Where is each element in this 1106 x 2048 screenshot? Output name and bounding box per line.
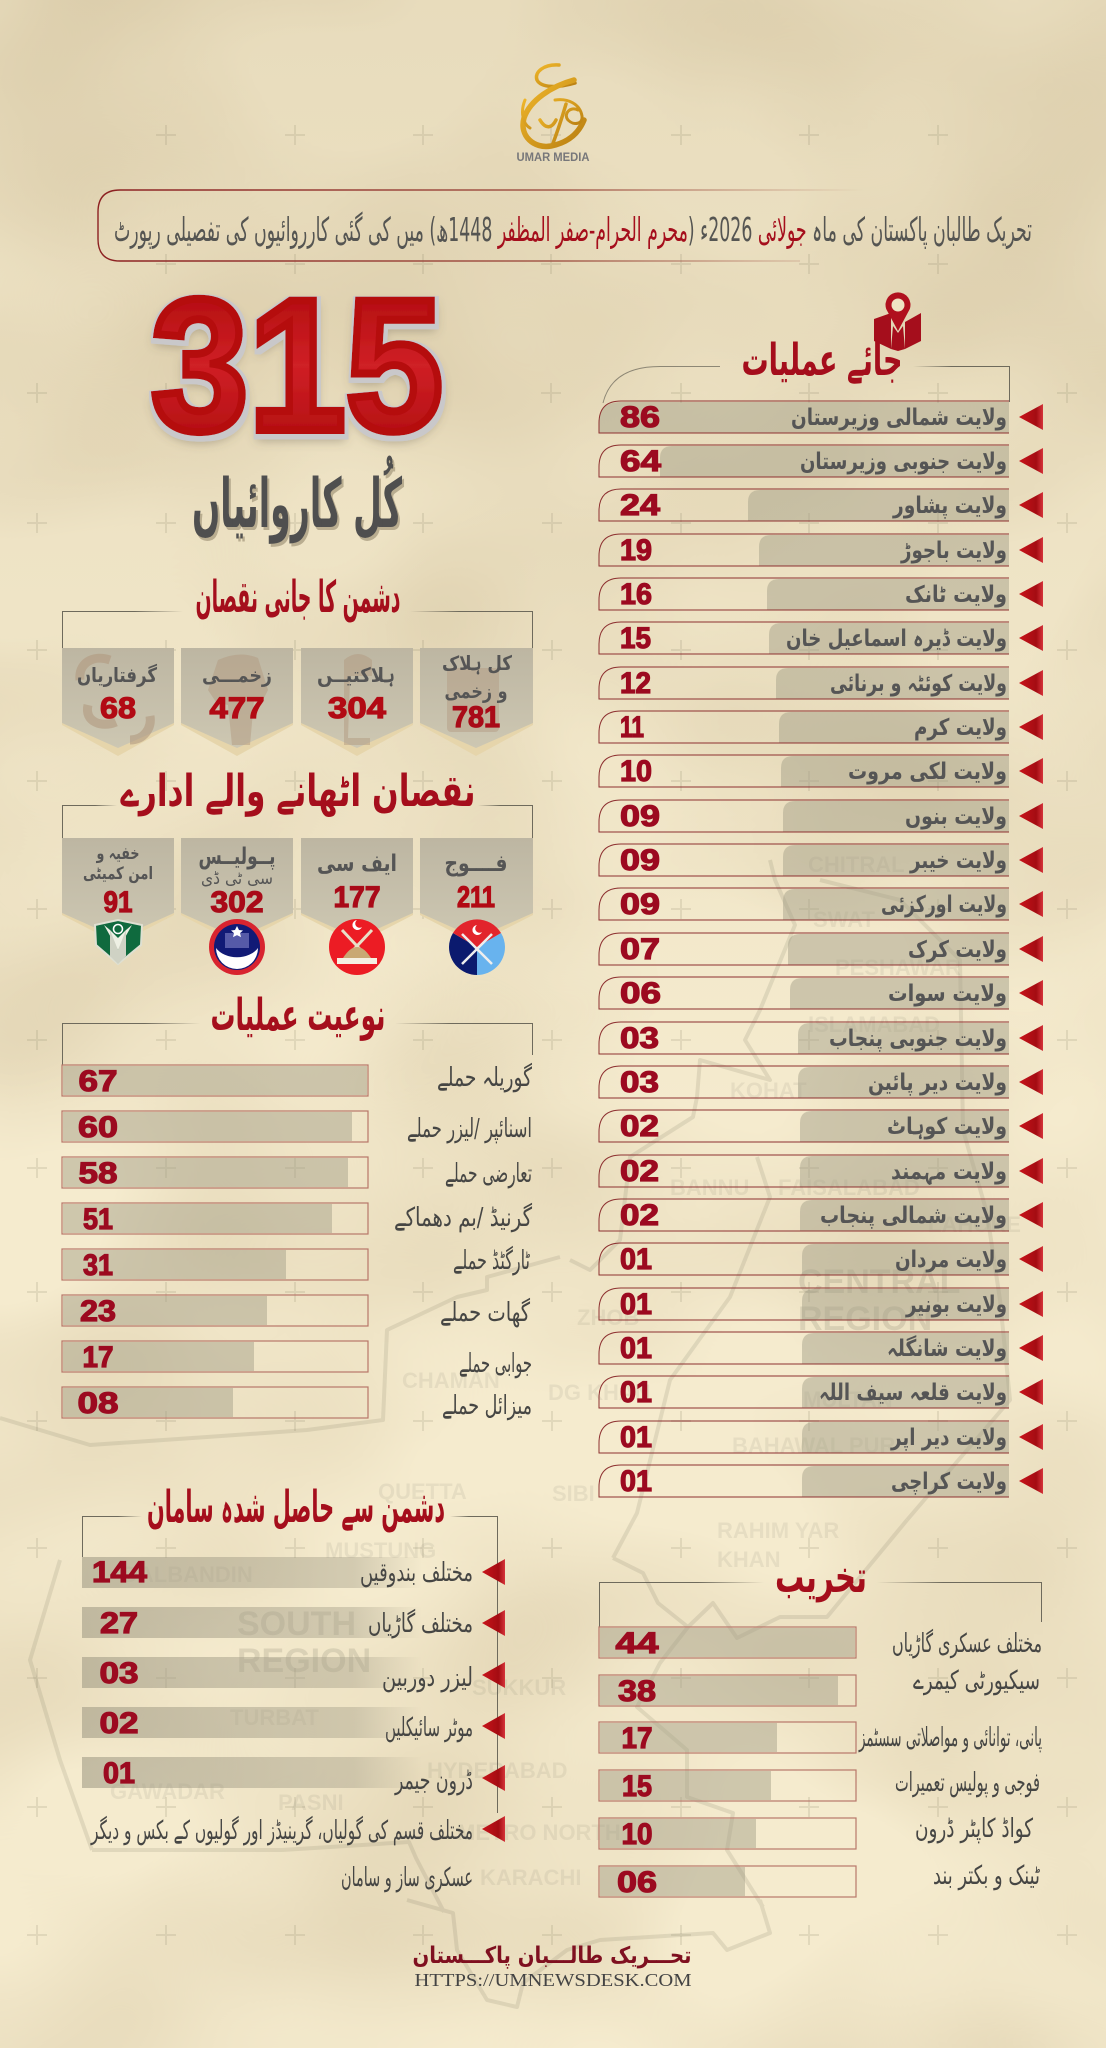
row: Karak 07 [599, 933, 1043, 966]
row: Mardan 01 [599, 1243, 1043, 1276]
row: South Waziristan 64: ولایت جنوبی وزیرستان [800, 449, 1007, 475]
row: Khyber 09 [599, 844, 1043, 877]
item: rifles 144: مختلف بندوقیں [360, 1558, 473, 1588]
background: faint map of Pakistan: KARACHI [480, 1865, 581, 1890]
row: Qila Saifullah 01 [599, 1376, 1043, 1409]
card: police and CTD: 302 [210, 886, 264, 919]
background: faint map of Pakistan: ISLAMABAD [808, 1012, 940, 1037]
row: Swat 06: 06 [620, 977, 661, 1010]
bar: utility systems 17 [599, 1722, 856, 1755]
row: Bannu 09: ولایت بنوں [905, 804, 1007, 830]
operation type labels: گرنیڈ /بم دھماکے [394, 1202, 532, 1233]
background: faint map of Pakistan: REGION [237, 1642, 371, 1680]
row: North Waziristan 86 [599, 401, 1043, 434]
bar: counter attacks 17 [62, 1341, 368, 1374]
sabotage labels: ٹینک و بکتر بند [933, 1861, 1041, 1891]
background: faint map of Pakistan: ZHOB [577, 1305, 639, 1330]
card: secret and peace committee: 91 [104, 886, 132, 919]
card: wounded: 477 [210, 692, 264, 725]
background: faint map of Pakistan: RAHIM YAR [717, 1518, 839, 1543]
row: Mardan 01: 01 [620, 1243, 652, 1276]
row: Shangla 01: ولایت شانگلہ [887, 1335, 1007, 1362]
row: Dera Ismail Khan 15: ولایت ڈیرہ اسماعیل خان [786, 626, 1007, 652]
bar: sniper and laser attacks 60 [62, 1111, 368, 1144]
background: faint map of Pakistan: KHAN [717, 1547, 781, 1572]
row: Karak 07: ولایت کرک [908, 937, 1007, 963]
card: secret and peace committee [62, 838, 174, 964]
row: Peshawar 24 [599, 489, 1043, 522]
bar: tanks and armour 06 [599, 1866, 856, 1899]
bar: military and police buildings 15: 15 [622, 1770, 652, 1803]
icon: gold calligraphic mark [523, 65, 584, 146]
background: faint map of Pakistan: PASNI [278, 1790, 344, 1815]
row: Orakzai 09 [599, 888, 1043, 921]
row: Bannu 09 [599, 800, 1043, 833]
row: Mohmand 02: 02 [620, 1155, 659, 1188]
row: Bajaur 19 [599, 534, 1043, 567]
row: Kurram 11: 11 [620, 711, 644, 744]
background: faint map of Pakistan: TURBAT [230, 1705, 319, 1730]
background: faint map of Pakistan: DALBANDIN [122, 1562, 253, 1587]
item: laser scopes 03: 03 [100, 1657, 138, 1690]
icon: police badge [209, 919, 265, 975]
item: rifles 144: 144 [92, 1556, 147, 1589]
row: Kohat 02: 02 [620, 1110, 659, 1143]
row: Karachi 01 [599, 1465, 1043, 1498]
footer [412, 1943, 692, 1990]
card: army: 211 [457, 881, 495, 914]
card: wounded: زخمـــی [202, 663, 272, 687]
bar: guerrilla attacks 67: 67 [78, 1065, 118, 1098]
row: Upper Dir 01: ولایت دیر اپر [890, 1425, 1007, 1451]
icon: map with location pin [874, 292, 921, 351]
row: Quetta and Barnai 12 [599, 667, 1043, 700]
heading: places of operations: جائے عملیات [742, 335, 902, 386]
row: Kohat 02 [599, 1110, 1043, 1143]
row: Orakzai 09: ولایت اورکزئی [881, 892, 1007, 918]
item: drone jammer 01: ڈرون جیمر [394, 1766, 473, 1796]
row: South Waziristan 64 [599, 445, 1043, 478]
background: faint map of Pakistan: SWAT [813, 907, 875, 932]
operation type labels: اسنائپر /لیزر حملے [407, 1114, 532, 1144]
row: Mohmand 02 [599, 1155, 1043, 1188]
panel: enemy casualties: دشمن کا جانی نقصان [196, 572, 400, 623]
row: Swat 06: ولایت سوات [888, 981, 1007, 1007]
item: vehicles 27: مختلف گاڑیاں [368, 1608, 473, 1639]
row: Lower Dir 03: ولایت دیر پائین [868, 1070, 1007, 1096]
row: Kurram 11: ولایت کرم [914, 715, 1007, 741]
operation type labels: تعارضی حملے [445, 1159, 532, 1189]
row: Lakki Marwat 10: ولایت لکی مروت [848, 759, 1007, 785]
row: Karachi 01: 01 [620, 1465, 652, 1498]
row: Mardan 01: ولایت مردان [895, 1247, 1007, 1273]
panel: enemy casualties [62, 572, 533, 756]
row: Kohat 02: ولایت کوہاٹ [887, 1114, 1007, 1140]
item: drone jammer 01: 01 [103, 1757, 135, 1790]
background: faint map of Pakistan: KOHAT [730, 1078, 807, 1103]
row: Lower Dir 03: 03 [620, 1066, 659, 1099]
row: Kurram 11 [599, 711, 1043, 744]
card: FC: 177 [334, 881, 380, 914]
row: Bajaur 19: ولایت باجوڑ [900, 538, 1007, 564]
background: faint map of Pakistan: GAWADAR [110, 1779, 225, 1804]
row: Khyber 09: ولایت خیبر [909, 848, 1007, 874]
row: Bajaur 19: 19 [620, 534, 652, 567]
operation type labels: گھات حملے [440, 1297, 530, 1328]
background: faint map of Pakistan: CHAMAN [402, 1368, 500, 1393]
card: army: فــــوج [444, 851, 508, 877]
bar: grenade and bomb blasts 51 [62, 1203, 368, 1236]
row: Tank 16: 16 [620, 578, 652, 611]
background: faint map of Pakistan: MUSTUNG [325, 1538, 436, 1563]
card: killed [301, 648, 413, 756]
panel: sabotage [599, 1552, 1042, 1899]
operation type labels: میزائل حملے [442, 1391, 532, 1421]
row: Tank 16: ولایت ٹانک [905, 582, 1007, 608]
row: Quetta and Barnai 12: 12 [620, 667, 651, 700]
operation type labels [394, 1062, 532, 1421]
operation type labels: گوریلہ حملے [437, 1062, 532, 1093]
card: secret and peace committee: امن کمیٹی [83, 864, 153, 884]
row: Lower Dir 03 [599, 1066, 1043, 1099]
item: ammunition and other equipment [90, 1815, 505, 1893]
infographic page: کُل کاروائیاں [192, 455, 402, 544]
background: faint map of Pakistan: PESHAWAR [835, 955, 961, 980]
sabotage labels: سیکیورٹی کیمرے [913, 1666, 1040, 1696]
icon: army badge [449, 919, 505, 975]
heading: affected institutions: نقصان اٹھانے والے ادارے [120, 766, 476, 817]
frame [603, 366, 1010, 403]
bar: military vehicles 44: 44 [616, 1627, 659, 1660]
bar: missile attacks 08 [62, 1387, 368, 1420]
item: motorcycles 02 [82, 1707, 505, 1743]
bar: targeted attacks 31 [62, 1249, 368, 1282]
item: drone jammer 01 [82, 1757, 505, 1796]
panel: institutions suffering losses [62, 766, 533, 975]
card: arrests: گرفتاریاں [77, 663, 157, 687]
bar: security cameras 38: 38 [618, 1675, 656, 1708]
card: FC [301, 838, 413, 975]
row: Lakki Marwat 10 [599, 755, 1043, 788]
card: police and CTD: سی ٹی ڈی [201, 869, 273, 889]
footer organisation name: تحـــریک طالـــبان پاکـــستان [412, 1943, 692, 1969]
bar: ambush attacks 23 [62, 1295, 368, 1328]
row: Tank 16 [599, 578, 1043, 611]
background: faint map of Pakistan: MULTAN [803, 1387, 893, 1412]
bar: clashes 58 [62, 1157, 368, 1190]
background: faint map of Pakistan: METRO NORTH [457, 1820, 621, 1845]
row: North Punjab 02 [599, 1199, 1043, 1232]
bar: utility systems 17: 17 [622, 1722, 652, 1755]
row: North Waziristan 86: ولایت شمالی وزیرستان [791, 405, 1007, 431]
background: faint map of Pakistan: CENTRAL [798, 1263, 960, 1301]
row: North Punjab 02: 02 [620, 1199, 659, 1232]
bar: sniper and laser attacks 60: 60 [78, 1111, 118, 1144]
item: laser scopes 03: لیزر دوربین [382, 1663, 473, 1693]
sabotage labels: کواڈ کاپٹر ڈرون [915, 1814, 1033, 1844]
bar: quadcopter drones 10 [599, 1818, 856, 1851]
item: motorcycles 02: 02 [100, 1707, 138, 1740]
row: Lakki Marwat 10: 10 [620, 755, 652, 788]
card: secret and peace committee: خفیہ و [96, 844, 140, 864]
bar: ambush attacks 23: 23 [80, 1295, 116, 1328]
total operations 315: 315 [151, 260, 443, 470]
icon: committee shield [95, 920, 142, 964]
row: Buner 01: ولایت بونیر [905, 1292, 1007, 1318]
panel: equipment seized from enemy: دشمن سے حاصل شدہ سامان [147, 1482, 445, 1533]
card: arrests [62, 648, 174, 756]
row: Karak 07: 07 [620, 933, 660, 966]
row: Khyber 09: 09 [620, 844, 660, 877]
background: faint map of Pakistan: BANNU [670, 1175, 749, 1200]
bar: grenade and bomb blasts 51: 51 [83, 1203, 113, 1236]
row: Buner 01: 01 [620, 1288, 652, 1321]
panel: places of operations [599, 292, 1043, 1498]
row: South Punjab 03: ولایت جنوبی پنجاب [829, 1026, 1007, 1052]
operation type labels: جوابی حملے [459, 1349, 532, 1379]
bar: guerrilla attacks 67 [62, 1065, 368, 1098]
bar: military vehicles 44 [599, 1627, 856, 1660]
row: Orakzai 09: 09 [620, 888, 660, 921]
icon: FC badge [329, 919, 385, 975]
row: Karachi 01: ولایت کراچی [891, 1469, 1007, 1495]
card: FC: ایف سی [317, 851, 397, 877]
bar: targeted attacks 31: 31 [83, 1249, 113, 1282]
background: faint map of Pakistan [0, 852, 1021, 2007]
row: Dera Ismail Khan 15: 15 [620, 622, 651, 655]
card: total killed and wounded: 781 [452, 701, 500, 734]
row: Peshawar 24: 24 [620, 489, 660, 522]
item: vehicles 27 [82, 1607, 505, 1640]
item: ammunition and other equipment: مختلف قسم کی گولیاں، گرینیڈز اور گولیوں کے بکس و دیگر [90, 1815, 473, 1846]
bar: security cameras 38 [599, 1675, 856, 1708]
row: Quetta and Barnai 12: ولایت کوئٹہ و برنائی [830, 671, 1007, 697]
panel: equipment seized from enemy [82, 1482, 505, 1893]
row: South Punjab 03 [599, 1022, 1043, 1055]
row: Buner 01 [599, 1288, 1043, 1321]
background: faint map of Pakistan: DG KHAN [548, 1380, 651, 1405]
card: police and CTD [181, 838, 293, 975]
background: faint map of Pakistan: SOUTH [237, 1605, 356, 1643]
card: total killed and wounded [420, 648, 533, 756]
row: North Punjab 02: ولایت شمالی پنجاب [820, 1203, 1007, 1229]
background: faint map of Pakistan: CHITRAL [808, 852, 905, 877]
row: South Punjab 03: 03 [620, 1022, 659, 1055]
background: faint map of Pakistan: FAISALABAD [778, 1175, 920, 1200]
row: Shangla 01 [599, 1332, 1043, 1365]
card: total killed and wounded: و زخمی [444, 679, 508, 703]
card: total killed and wounded: کل ہلاک [442, 651, 512, 675]
row: Bannu 09: 09 [620, 800, 660, 833]
row: Mohmand 02: ولایت مہمند [891, 1159, 1007, 1185]
row: Dera Ismail Khan 15 [599, 622, 1043, 655]
item: motorcycles 02: موٹر سائیکلیں [385, 1713, 473, 1743]
title box [98, 190, 1032, 261]
bar: counter attacks 17: 17 [82, 1341, 114, 1374]
background: faint map of Pakistan: BAHAWAL PUR [732, 1433, 895, 1458]
card: army [420, 838, 533, 975]
bar: quadcopter drones 10: 10 [622, 1818, 652, 1851]
bar: tanks and armour 06: 06 [617, 1866, 657, 1899]
background: faint map of Pakistan: HYDERABAD [427, 1758, 568, 1783]
row: South Waziristan 64: 64 [620, 445, 661, 478]
row: Peshawar 24: ولایت پشاور [892, 493, 1007, 519]
card: police and CTD: پــولیــس [198, 844, 276, 870]
heading: nature of operations: نوعیت عملیات [210, 990, 386, 1041]
background: faint map of Pakistan: QUETTA [378, 1479, 467, 1504]
sabotage labels [858, 1628, 1042, 1891]
item: laser scopes 03 [82, 1657, 505, 1693]
bar: missile attacks 08: 08 [78, 1387, 118, 1420]
card: arrests: 68 [100, 692, 136, 725]
item: vehicles 27: 27 [100, 1607, 138, 1640]
row: Swat 06 [599, 977, 1043, 1010]
bar: clashes 58: 58 [78, 1157, 118, 1190]
logo: Umar Media [516, 65, 590, 164]
background: faint map of Pakistan: SIBI [552, 1481, 595, 1506]
logo wordmark: UMAR MEDIA [516, 150, 590, 164]
card: wounded [181, 648, 293, 756]
row: Qila Saifullah 01: ولایت قلعہ سیف اللہ [819, 1380, 1007, 1406]
row: Upper Dir 01 [599, 1421, 1043, 1454]
background: faint map of Pakistan: SUKKUR [472, 1675, 566, 1700]
item: rifles 144 [82, 1556, 505, 1589]
background: faint map of Pakistan: LAHORE [928, 1212, 1021, 1237]
row: Qila Saifullah 01: 01 [620, 1376, 652, 1409]
panel: nature of operations [62, 990, 533, 1421]
operation type labels: ٹارگٹڈ حملے [453, 1245, 530, 1276]
background: faint map of Pakistan: REGION [798, 1300, 932, 1338]
item: ammunition and other equipment: عسکری ساز و سامان [341, 1863, 473, 1893]
row: Shangla 01: 01 [620, 1332, 652, 1365]
heading: sabotage: تخریب [775, 1552, 867, 1603]
bar: military and police buildings 15 [599, 1770, 856, 1803]
footer URL: HTTPS://UMNEWSDESK.COM [414, 1970, 692, 1990]
row: Upper Dir 01: 01 [620, 1421, 652, 1454]
row: North Waziristan 86: 86 [620, 401, 660, 434]
card: killed: 304 [328, 692, 386, 725]
card: killed: ہلاکتیــں [317, 663, 395, 687]
